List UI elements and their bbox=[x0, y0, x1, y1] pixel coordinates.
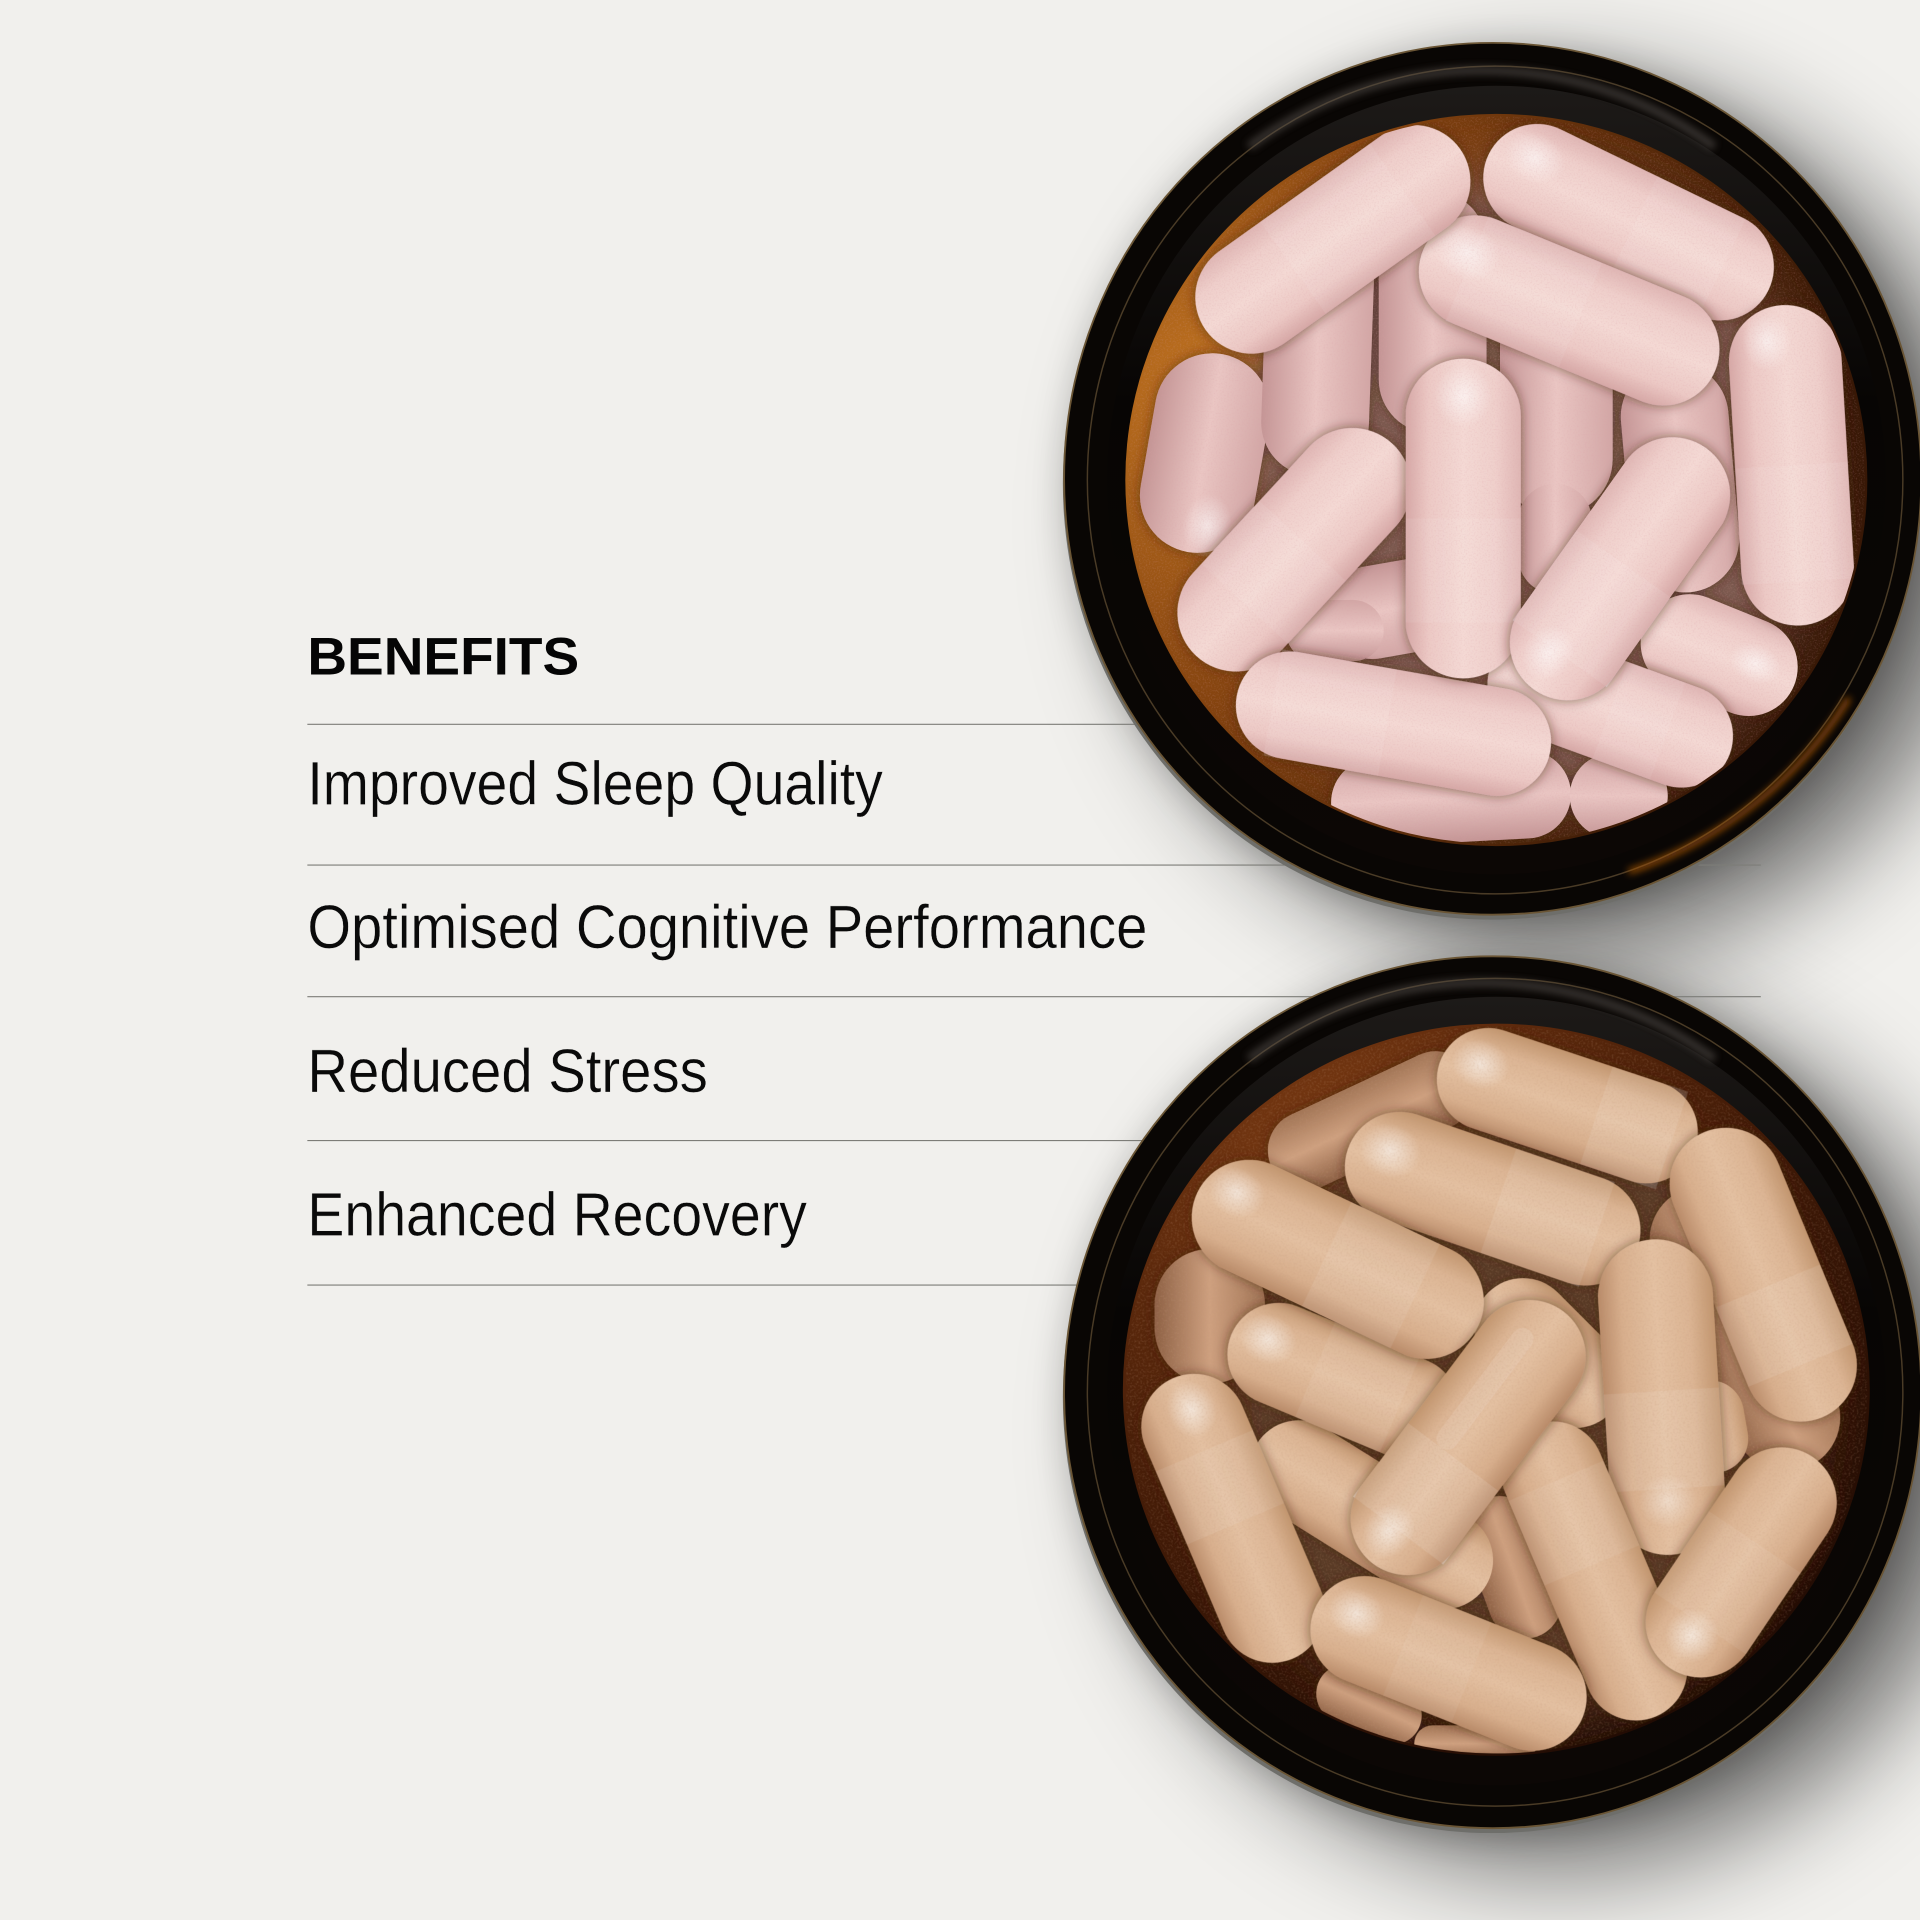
capsule M bbox=[1652, 1111, 1874, 1439]
capsule O bbox=[1212, 1287, 1475, 1475]
capsule T bbox=[1624, 1426, 1858, 1699]
jar: pink capsules bbox=[1063, 43, 1920, 920]
capsule B bbox=[1478, 121, 1774, 326]
jar shadows bbox=[1065, 47, 1920, 1869]
capsule A bbox=[1189, 123, 1475, 361]
capsule I bbox=[1482, 653, 1736, 794]
capsule P bbox=[1328, 1278, 1608, 1598]
capsule K bbox=[1330, 1097, 1655, 1300]
capsule E bbox=[1172, 420, 1406, 676]
capsule R bbox=[1294, 1560, 1603, 1767]
back capsules bbox=[1130, 191, 1812, 849]
benefit: recovery: Enhanced Recovery bbox=[307, 1181, 807, 1249]
capsule C bbox=[1410, 208, 1725, 414]
divider lines bbox=[307, 724, 1761, 1285]
shaded gaps beneath capsules bbox=[1231, 178, 1806, 802]
benefit: sleep: Improved Sleep Quality bbox=[307, 749, 883, 817]
capsule L bbox=[1173, 1141, 1503, 1378]
heading: benefits: BENEFITS bbox=[307, 628, 579, 687]
powder speckle bbox=[1127, 1022, 1873, 1757]
benefit: stress: Reduced Stress bbox=[307, 1037, 708, 1105]
capsule D bbox=[1726, 302, 1857, 629]
capsule Q bbox=[1125, 1357, 1341, 1679]
benefit: cognitive: Optimised Cognitive Performance bbox=[307, 893, 1147, 961]
benefits list bbox=[307, 749, 1147, 1249]
capsule J bbox=[1423, 1014, 1711, 1197]
capsule S bbox=[1485, 1406, 1703, 1737]
capsule F bbox=[1406, 359, 1521, 678]
capsule H bbox=[1227, 643, 1560, 804]
back capsules bbox=[1155, 1038, 1858, 1762]
shaded gaps beneath capsules bbox=[1218, 1102, 1806, 1714]
jar: beige capsules bbox=[1063, 956, 1920, 1833]
capsule G bbox=[1487, 415, 1753, 723]
capsule N bbox=[1595, 1236, 1729, 1558]
powder speckle bbox=[1127, 110, 1873, 851]
